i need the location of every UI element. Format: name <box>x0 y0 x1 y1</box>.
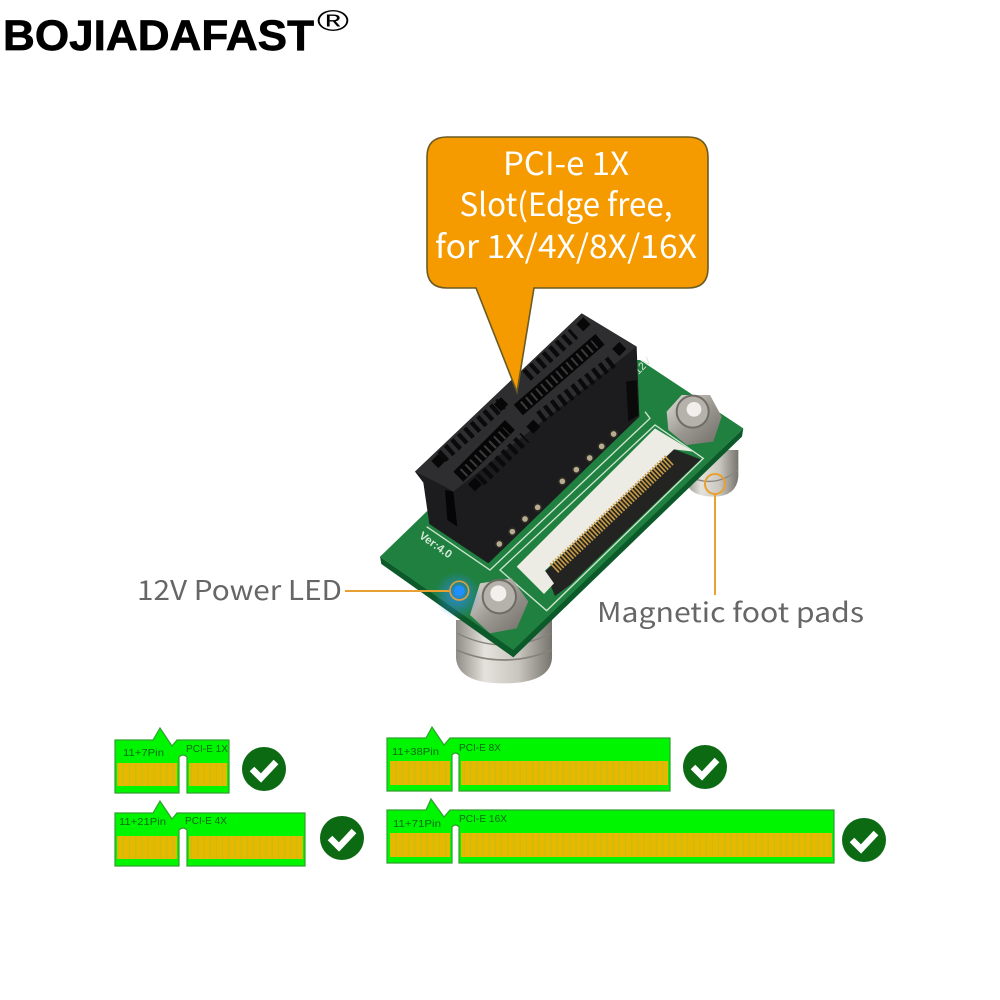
power LED <box>434 572 481 618</box>
green circuit board <box>380 355 743 657</box>
card: PCI-E 4X: 11+21Pin <box>119 816 166 828</box>
callout: PCI-e 1X slot: Slot(Edge free, <box>460 180 672 226</box>
card: PCI-E 8X <box>387 727 670 791</box>
card: PCI-E 8X: PCI-E 8X <box>459 742 501 754</box>
check icon: 4X <box>320 816 364 860</box>
callout: PCI-e 1X slot <box>427 137 708 392</box>
card: PCI-E 16X <box>387 799 834 863</box>
green circuit board: 12V <box>632 355 654 377</box>
callout: PCI-e 1X slot: PCI-e 1X <box>503 139 629 185</box>
FFC ribbon connector <box>517 428 701 596</box>
hex bolt: front <box>470 578 528 633</box>
check icon: 1X <box>242 747 286 791</box>
card: PCI-E 4X <box>115 801 305 866</box>
card: PCI-E 16X: PCI-E 16X <box>459 813 507 825</box>
slot ribs <box>442 403 502 457</box>
magnetic foot: front <box>456 620 552 683</box>
PCIe slot connector, black <box>415 313 639 563</box>
brand title: BOJIADAFAST <box>3 12 314 60</box>
card: PCI-E 16X: 11+71Pin <box>393 818 441 830</box>
product photo: PCIe adapter board <box>380 313 743 683</box>
label: magnetic pads: Magnetic foot pads <box>597 591 864 630</box>
magnetic foot: rear <box>685 450 738 497</box>
card: PCI-E 1X <box>115 728 229 793</box>
card: PCI-E 1X: PCI-E 1X <box>186 743 228 755</box>
label: power LED: 12V Power LED <box>137 569 342 608</box>
green circuit board: Ver:4.0 <box>417 530 454 561</box>
callout: PCI-e 1X slot: for 1X/4X/8X/16X <box>435 222 697 268</box>
hex bolt: rear <box>667 395 722 445</box>
leader line: magnetic pads <box>705 474 725 595</box>
card: PCI-E 4X: PCI-E 4X <box>185 815 227 827</box>
card: PCI-E 8X: 11+38Pin <box>392 746 439 758</box>
card: PCI-E 1X: 11+7Pin <box>123 747 164 759</box>
leader line: power LED <box>345 590 450 592</box>
through-hole solder pins <box>496 430 617 548</box>
check icon: 8X <box>683 745 727 789</box>
check icon: 16X <box>842 818 886 862</box>
brand title: ® <box>317 5 349 38</box>
